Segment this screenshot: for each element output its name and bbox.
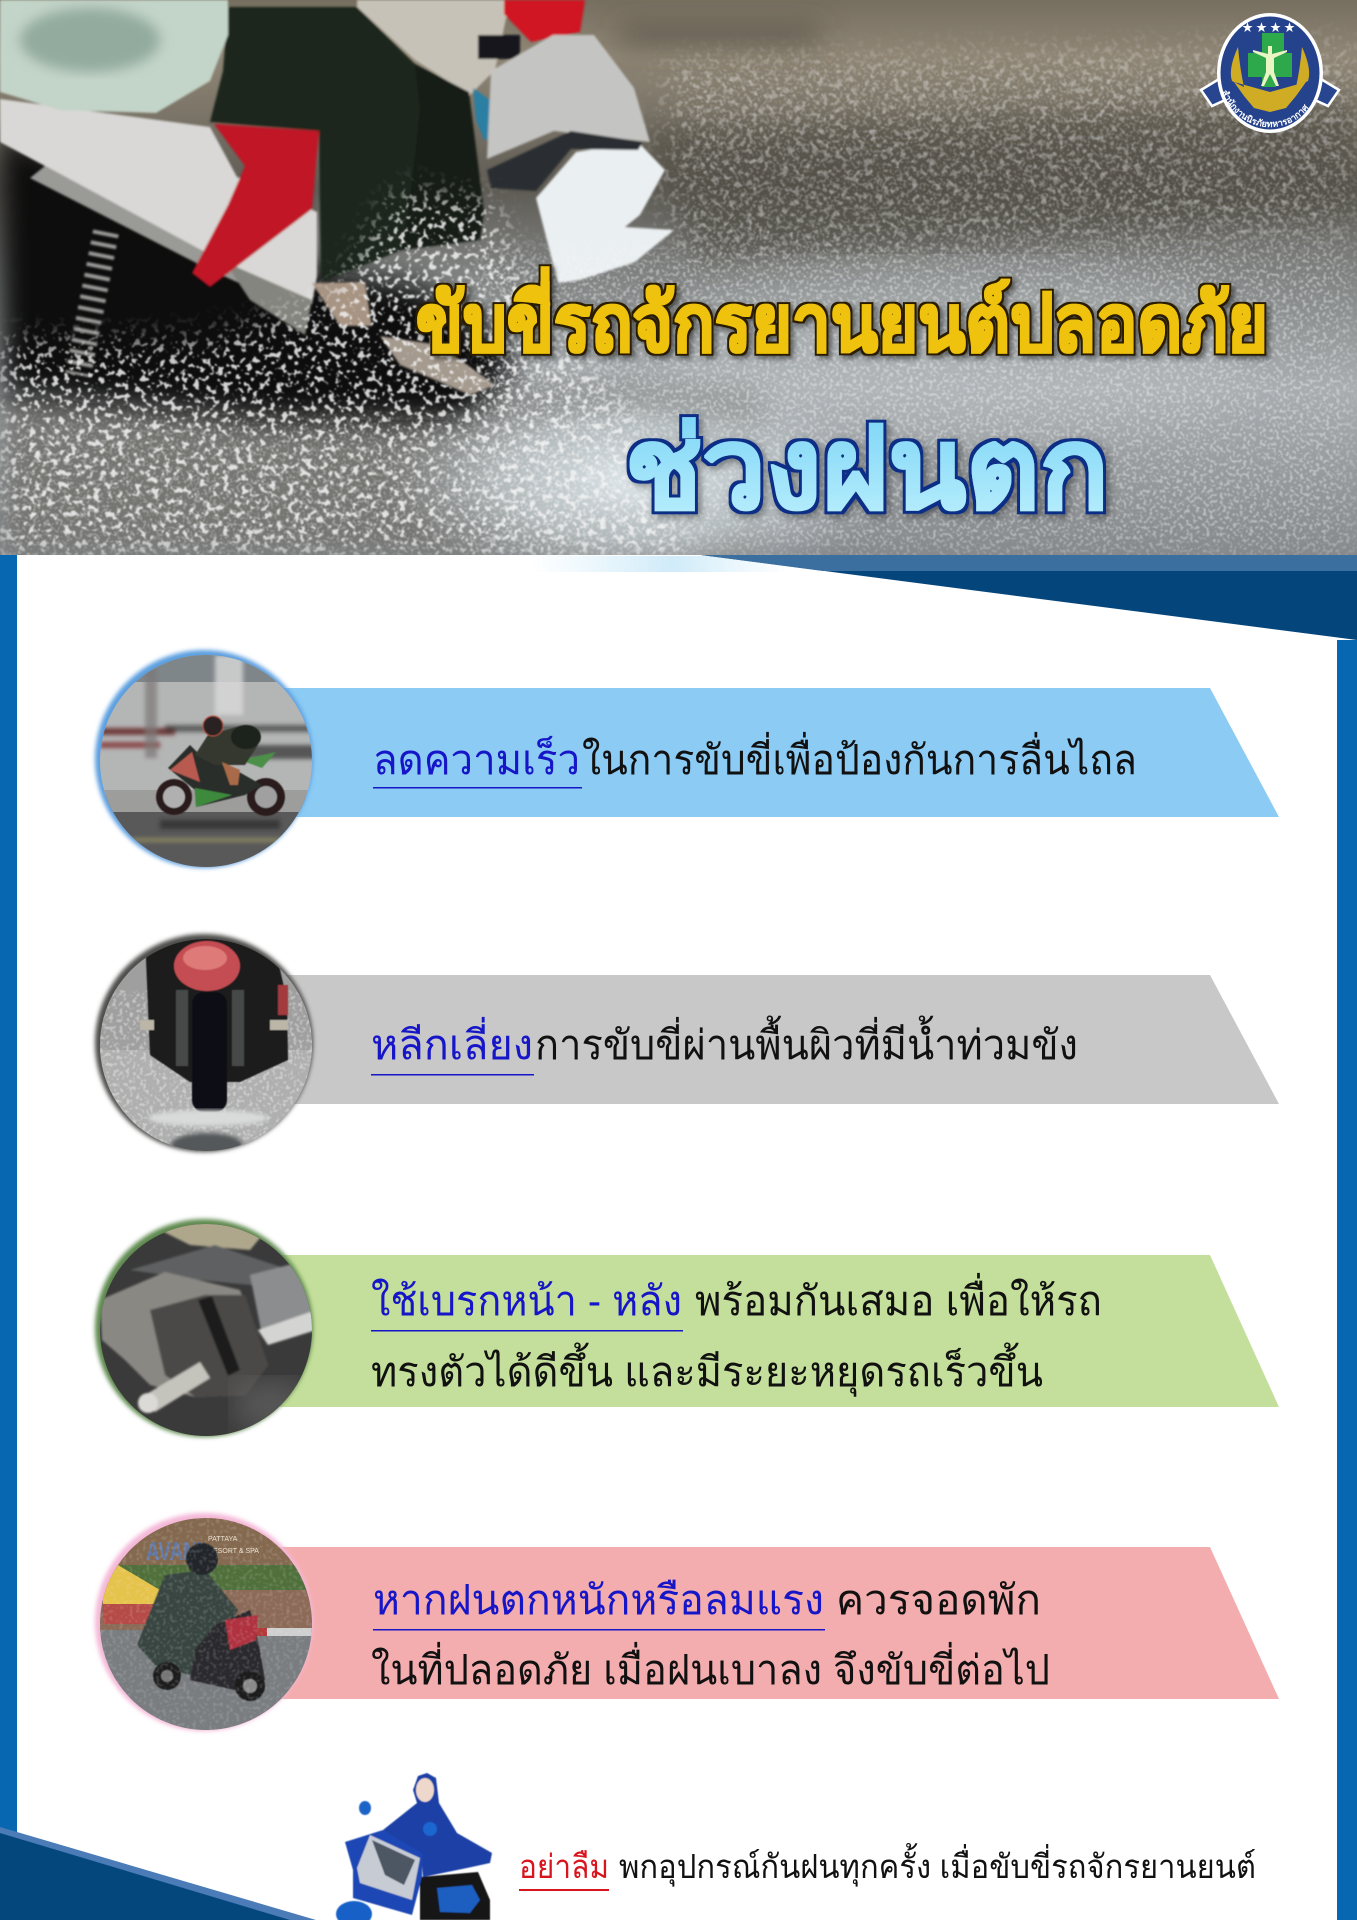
banner 3 text [371, 1273, 1102, 1397]
photo: rider in heavy rain [95, 1515, 320, 1730]
emphasis: หากฝนตกหนักหรือลมแรง [373, 1577, 824, 1623]
rider foot [312, 282, 372, 326]
grey area behind fairing [357, 0, 510, 95]
shock spring [78, 232, 106, 375]
windshield cover [345, 1830, 422, 1915]
logo wreath [1231, 47, 1309, 112]
body line 1: พร้อมกันเสมอ เพื่อให้รถ [695, 1273, 1102, 1324]
reminder text [519, 1843, 1256, 1891]
emphasis: ใช้เบรกหน้า - หลัง [371, 1278, 682, 1324]
body line 2: ในที่ปลอดภัย เมื่อฝนเบาลง จึงขับขี่ต่อไป [371, 1642, 1050, 1693]
frame: left blue border [0, 555, 17, 1920]
mirrors [359, 1801, 371, 1815]
photo: rider in heavy rain: PATTAYA [208, 1536, 238, 1543]
underline [373, 787, 582, 788]
logo caption: สำนักงานนิรภัยทหารอากาศ [1223, 90, 1308, 128]
water droplets [0, 0, 1357, 555]
ring [95, 1219, 313, 1437]
rider [137, 1543, 265, 1701]
logo green cross [1248, 33, 1292, 87]
banner 4: stop in heavy rain [95, 1513, 1279, 1731]
green poncho [0, 0, 228, 113]
body: การขับขี่ผ่านพื้นผิวที่มีน้ำท่วมขัง [535, 1015, 1078, 1068]
white bike body [0, 99, 317, 304]
banner 2: avoid flooded surfaces [95, 934, 1279, 1160]
underline [519, 1889, 609, 1891]
emphasis: หลีกเลี่ยง [371, 1017, 533, 1068]
underline [373, 1629, 825, 1630]
banner 1: reduce speed [95, 650, 1279, 875]
logo stars: ★★★★ [1242, 22, 1298, 34]
ground and dark underside [0, 390, 760, 555]
white fairing [487, 35, 650, 159]
title line 2: ช่วงฝนตก [625, 406, 1109, 533]
ring [95, 650, 313, 868]
banner shape [280, 688, 1279, 817]
logo ribbon ends [1201, 76, 1339, 106]
poncho [383, 1773, 492, 1877]
body line 2: ทรงตัวได้ดีขึ้น และมีระยะหยุดรถเร็วขึ้น [371, 1342, 1043, 1397]
illustration: rider in blue rain poncho [336, 1773, 492, 1920]
underline [371, 1330, 683, 1332]
corner: bottom left triangle [0, 1827, 316, 1920]
emphasis: ลดความเร็ว [373, 736, 580, 783]
photo: front wheel in water [100, 939, 312, 1151]
banner 2 text [371, 1015, 1078, 1076]
ring [95, 1513, 313, 1731]
taxi [103, 1565, 160, 1606]
banner shape [280, 1547, 1279, 1699]
photo sign: AVANI [146, 1536, 202, 1566]
body: พกอุปกรณ์กันฝนทุกครั้ง เมื่อขับขี่รถจักรยานยนต์ [619, 1843, 1256, 1887]
photo: gloved hand on brake lever [100, 1224, 312, 1436]
banner shape [280, 1255, 1279, 1407]
photo: speeding motorcycle [100, 655, 312, 867]
photo: rider in heavy rain: RESORT & SPA [208, 1548, 259, 1555]
logo disc [1217, 13, 1323, 133]
body line 1: ควรจอดพัก [836, 1577, 1041, 1623]
underline [371, 1074, 534, 1076]
banner 4 text [371, 1577, 1050, 1693]
corner: top right dark triangle [530, 555, 1357, 640]
scooter rear [420, 1872, 490, 1920]
banner shape [280, 975, 1279, 1104]
frame: right blue border [1337, 640, 1357, 1920]
logo figure [1253, 46, 1287, 86]
logo: agency emblem [1199, 13, 1341, 133]
banner 1 text [373, 732, 1137, 788]
motorcycle [156, 716, 285, 816]
body: ในการขับขี่เพื่อป้องกันการลื่นไถล [582, 732, 1137, 783]
blue bag [472, 88, 490, 142]
emphasis: อย่าลืม [519, 1848, 609, 1885]
red raincoat [192, 124, 319, 287]
ring [95, 934, 313, 1152]
banner 3: use both brakes [95, 1219, 1279, 1444]
front fender [336, 1901, 372, 1920]
rider legs [402, 64, 484, 250]
header photo: motorcycle splashing through rain water [0, 0, 1357, 590]
